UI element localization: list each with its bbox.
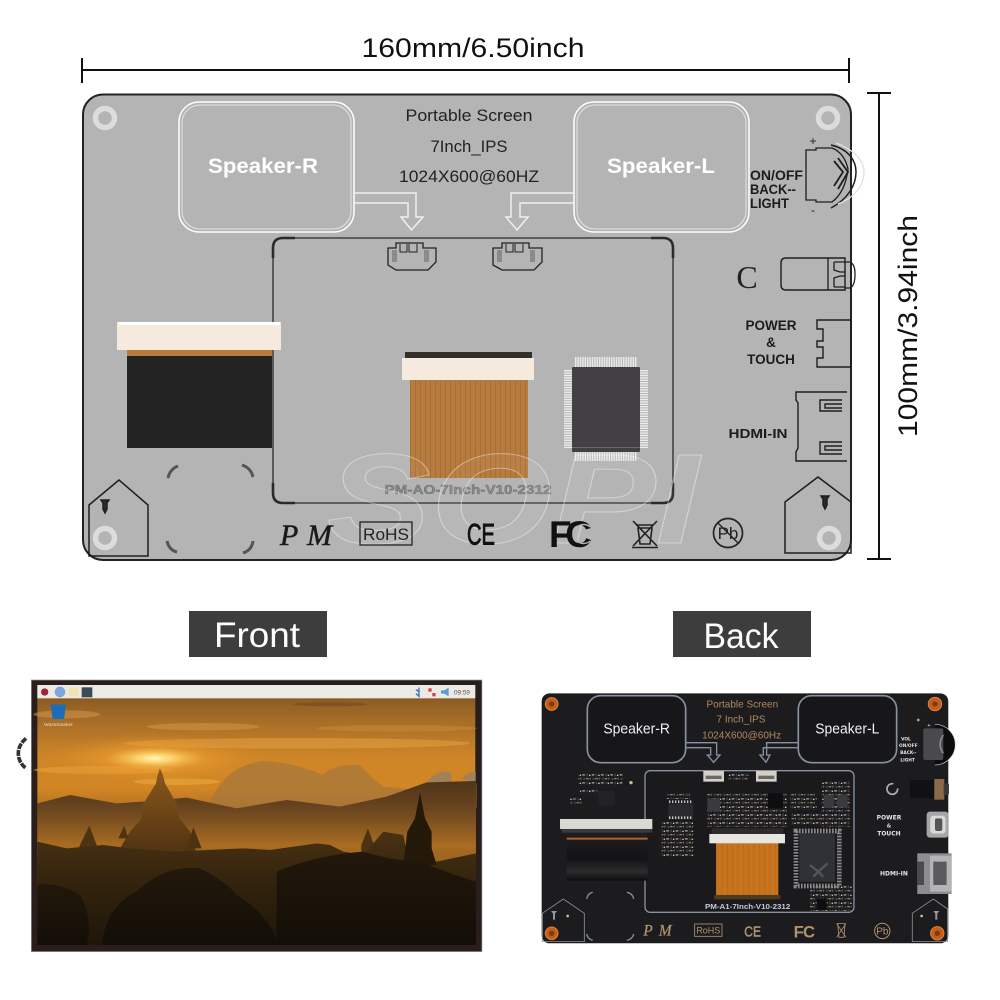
wheel switch: - [811, 203, 815, 217]
labels: LIGHT [900, 758, 915, 764]
label: on/off backlight: LIGHT [750, 196, 790, 211]
sky streaks [33, 702, 477, 785]
connector left [388, 243, 436, 270]
screen bezel [31, 680, 482, 952]
tree line [37, 832, 476, 945]
left ribbon cable [117, 322, 281, 448]
logos [642, 922, 890, 941]
main pagoda [100, 768, 203, 882]
label: power and touch: POWER [745, 318, 797, 333]
logos: PM [642, 923, 673, 940]
centre ribbon cable [709, 828, 785, 899]
speaker R box [587, 696, 686, 763]
chip [796, 831, 839, 886]
mounting holes [96, 108, 838, 548]
inner frame [273, 238, 673, 503]
dimension: width 160mm [82, 33, 849, 83]
chip [568, 362, 644, 456]
logos: Pb [876, 927, 889, 938]
label: on/off backlight: ON/OFF [750, 168, 803, 183]
speaker L box [574, 102, 749, 232]
side button [18, 738, 26, 768]
logo CE: CE [467, 518, 495, 552]
HDMI port [917, 853, 952, 894]
speaker R box: Speaker-R [603, 721, 670, 737]
icon: C audio: C [736, 259, 758, 295]
heading: Back [673, 611, 811, 657]
wallpaper sky [37, 685, 475, 945]
wheel switch: + [927, 723, 931, 729]
panel: board schematic [83, 94, 864, 571]
mountains [37, 781, 476, 862]
logos: FC [794, 922, 815, 941]
wheel switch [806, 134, 864, 217]
heading: Front: Front [214, 616, 300, 655]
logo recycle bin [632, 521, 658, 548]
labels: HDMI-IN [880, 871, 908, 878]
board outline [83, 94, 851, 560]
panel: back photo of board [542, 693, 955, 943]
product text: 1024X600@60Hz [702, 730, 781, 741]
USB-C port [927, 812, 949, 838]
label: on/off backlight [750, 168, 803, 211]
arrow: speaker R to connector [355, 193, 423, 230]
wheel switch [923, 723, 955, 765]
labels [877, 736, 918, 878]
label: HDMI-IN: HDMI-IN [728, 426, 788, 441]
dimension: height 100mm [867, 93, 923, 559]
desktop trash icon: Wastebasket [44, 722, 73, 728]
centre ribbon cable [402, 352, 534, 478]
speaker L box: Speaker-L [607, 154, 715, 178]
label: on/off backlight: BACK-- [750, 182, 796, 197]
heading: Front [189, 611, 327, 657]
logo Pb [714, 518, 742, 548]
labels: ON/OFF [899, 743, 918, 749]
components [566, 719, 923, 917]
HDMI port [796, 392, 847, 461]
speaker L box [798, 696, 897, 763]
logo Pb: Pb [718, 524, 738, 543]
product text [399, 106, 539, 186]
product text: 7 Inch_IPS [716, 715, 765, 726]
screw glyphs [551, 911, 939, 920]
C icon [887, 784, 898, 794]
screw pentagon right [785, 477, 851, 553]
logo FC: FC [549, 514, 592, 555]
product text: 7Inch_IPS [430, 137, 508, 156]
product text: 1024X600@60HZ [399, 167, 539, 186]
pcb [542, 693, 948, 943]
watermark: SOPI: SOPI [327, 428, 702, 571]
connectors [703, 771, 777, 782]
label: power and touch: TOUCH [747, 352, 795, 367]
board model text: PM-A1-7Inch-V10-2312 [705, 902, 790, 911]
screw pentagon left [89, 480, 148, 556]
copper standoffs [545, 697, 944, 940]
inner frame [645, 771, 854, 912]
speaker R box [179, 102, 354, 232]
logos: CE [744, 925, 761, 941]
standoff centres [549, 701, 940, 936]
sun glow [45, 733, 265, 783]
audio jack [781, 258, 855, 290]
desktop trash icon [44, 704, 73, 728]
speaker R box: Speaker-R [208, 154, 318, 178]
taskbar [37, 685, 475, 698]
logos: RoHS [696, 926, 720, 936]
connector right [493, 243, 542, 270]
labels: TOUCH [877, 830, 901, 837]
arrows [686, 743, 798, 762]
labels: BACK-- [900, 750, 917, 756]
USB-C port [817, 320, 851, 367]
taskbar: 09:59 [454, 689, 470, 696]
speaker L box: Speaker-L [815, 721, 879, 737]
arrow: speaker L to connector [506, 193, 573, 230]
clouds [210, 761, 477, 808]
right pagoda [403, 792, 437, 865]
corner marks [167, 465, 253, 553]
small pagodas [63, 826, 375, 888]
logo RoHS: RoHS [363, 525, 409, 544]
label: power and touch: & [766, 335, 776, 350]
audio jack [910, 779, 949, 800]
left ribbon cable [560, 819, 652, 881]
corner marks [587, 892, 634, 940]
product text [702, 700, 781, 741]
screw pentagons [542, 899, 948, 942]
foreground trees [37, 852, 476, 945]
labels: POWER [877, 814, 902, 821]
dimension: width 160mm: 160mm/6.50inch [362, 33, 584, 63]
panel: front photo of screen [18, 680, 482, 952]
product text: Portable Screen [406, 106, 532, 125]
wheel switch: + [809, 134, 817, 148]
labels: & [887, 823, 892, 829]
product text: Portable Screen [706, 700, 778, 711]
logo PM: PM [279, 519, 334, 552]
board model text: PM-AO-7Inch-V10-2312 [384, 482, 552, 497]
dimension: height 100mm: 100mm/3.94inch [893, 215, 923, 437]
labels: VOL [901, 736, 911, 742]
label: power and touch [745, 318, 797, 367]
heading: Back: Back [704, 617, 779, 656]
